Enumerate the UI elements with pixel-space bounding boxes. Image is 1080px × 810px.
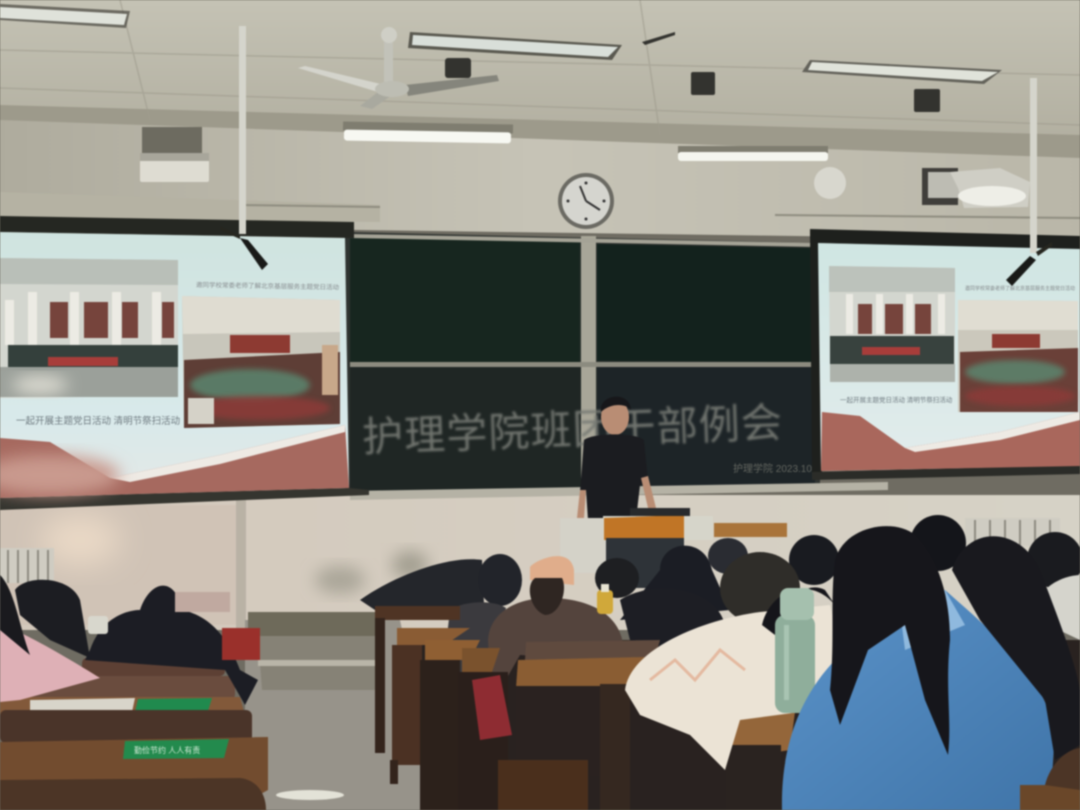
left wall projector <box>140 127 209 182</box>
water bottle on desk <box>597 584 613 614</box>
board date note: 护理学院 2023.10.8 <box>733 462 821 475</box>
ceiling microphone pole right <box>1006 78 1052 286</box>
desks centre rows <box>375 606 795 810</box>
ceiling lights <box>0 4 1002 84</box>
slide captions: 邀同学校常委老师了解北京基层服务主题党日活动 <box>965 285 1075 292</box>
student with peach cap <box>488 556 623 690</box>
right wall projector <box>922 168 1030 208</box>
right projection screen: 一起开展主题党日活动 清明节祭扫活动 <box>840 395 953 404</box>
floor <box>245 612 440 810</box>
seated students mid rows <box>360 515 1080 680</box>
dark backdrop under centre rows <box>420 640 1080 810</box>
student in blue jacket <box>782 526 1080 810</box>
ceiling fan <box>298 27 499 109</box>
ceiling cameras and small fixtures <box>445 32 940 112</box>
green thermos bottle <box>775 588 815 713</box>
board heading: 护理学院班团干部例会 <box>361 400 783 460</box>
back wall <box>0 120 1080 240</box>
lectern <box>560 508 787 588</box>
slide photo: indoor group <box>958 300 1078 412</box>
blackboard <box>345 232 888 500</box>
fluorescent tube lights <box>343 122 828 161</box>
left projection screen: 一起开展主题党日活动 清明节祭扫活动 <box>16 415 180 427</box>
desks left rows <box>0 658 268 810</box>
ceiling microphone pole left <box>220 26 268 270</box>
seated students left <box>0 575 260 705</box>
ceiling <box>0 0 1080 170</box>
student in cream sweater <box>625 552 845 770</box>
right projection screen <box>810 229 1080 480</box>
slide photo: building group <box>0 258 178 398</box>
left projection screen <box>0 216 369 510</box>
slide photo: indoor group <box>182 296 340 428</box>
desk notice sign text: 勤俭节约 人人有责 <box>134 745 200 755</box>
wall clock <box>558 167 846 229</box>
lower wall <box>0 495 1080 630</box>
slide captions: 邀同学校常委老师了解北京基层服务主题党日活动 <box>196 280 340 292</box>
slide bottom red band <box>821 412 1080 471</box>
radiators <box>0 518 1060 583</box>
slide photo: building group <box>829 266 955 382</box>
lecturer <box>577 397 656 520</box>
slide bottom red band <box>0 425 349 498</box>
